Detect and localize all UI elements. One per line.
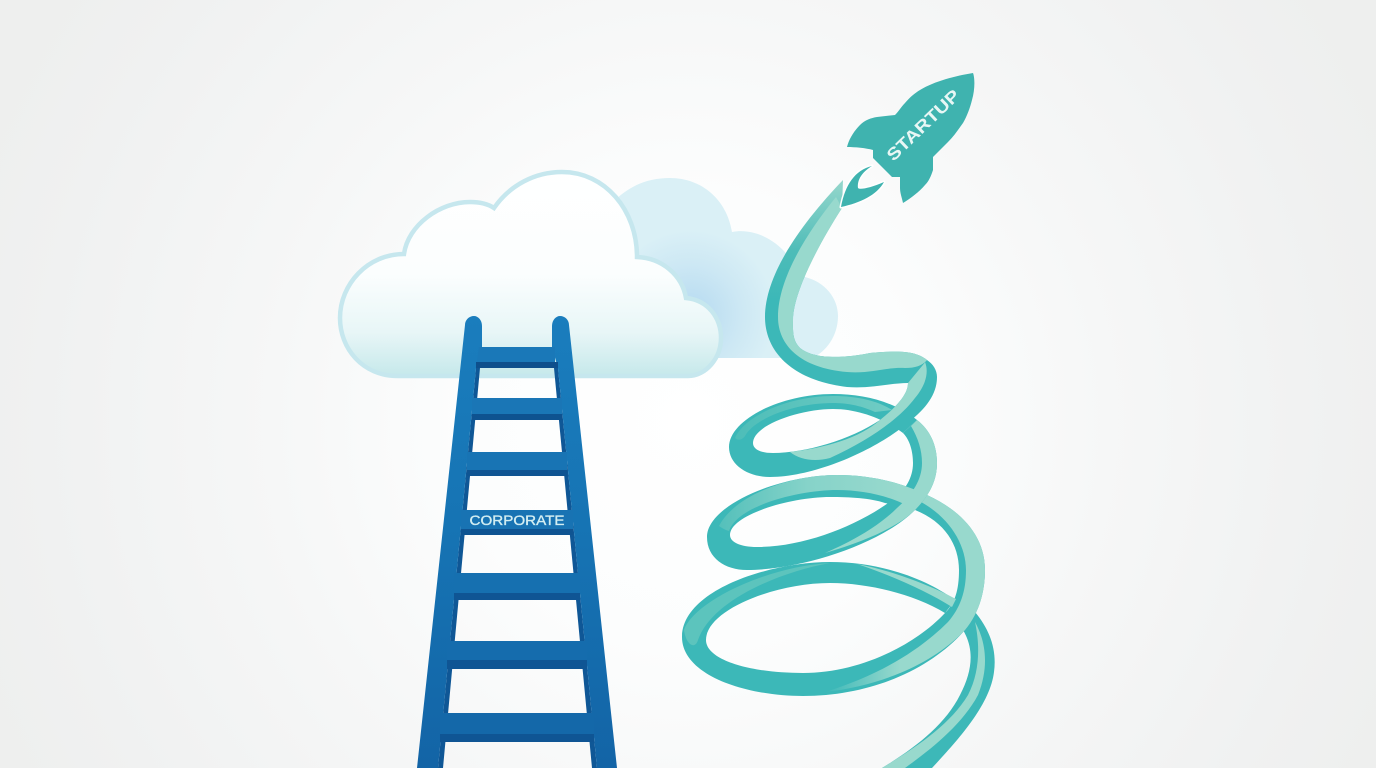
back cloud <box>600 178 838 358</box>
ladder inner shadows <box>438 368 597 768</box>
ribbon tail <box>882 612 995 768</box>
ladder <box>417 316 617 768</box>
ladder rungs <box>440 347 594 742</box>
rocket <box>841 73 974 207</box>
ladder label: CORPORATE <box>470 512 564 528</box>
rocket body <box>847 73 974 203</box>
ribbon top curl rising to rocket <box>765 180 927 387</box>
ribbon loop 2 <box>729 360 937 477</box>
ribbon loop 4 <box>682 495 985 696</box>
rocket flame <box>841 166 884 207</box>
startup spiral ribbon <box>682 180 995 768</box>
front cloud <box>340 172 721 376</box>
ladder right rail <box>552 316 617 768</box>
ribbon loop 3 <box>707 420 937 570</box>
ladder left rail <box>417 316 482 768</box>
rocket label: STARTUP <box>883 86 964 165</box>
